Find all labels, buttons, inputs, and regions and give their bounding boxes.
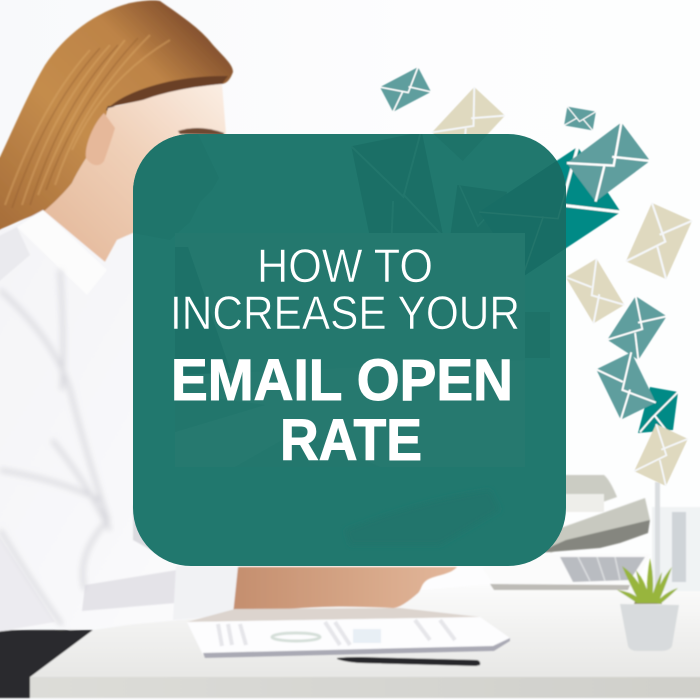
desk — [30, 585, 700, 698]
pen — [337, 657, 480, 666]
floating envelopes — [380, 67, 692, 486]
envelope: teal large — [567, 122, 650, 202]
envelope: teal lower — [596, 352, 656, 420]
white shirt — [0, 210, 240, 632]
heading: email open rate: RATE — [280, 408, 422, 473]
envelope: dark teal large — [479, 147, 621, 277]
potted plant — [617, 558, 679, 651]
envelope: beige lower — [634, 424, 688, 486]
arm and hand — [233, 567, 457, 615]
envelope: beige right — [626, 203, 692, 279]
envelope: teal tiny — [564, 107, 596, 130]
heading: email open rate — [171, 348, 513, 473]
envelope: dark teal small folds — [640, 392, 678, 432]
envelope: teal mid — [607, 296, 667, 360]
laptop screen rectangle seen through panel — [370, 233, 525, 276]
woman hair — [0, 0, 233, 232]
donut chart on paper — [272, 633, 320, 641]
papers on desk — [187, 608, 510, 658]
heading: email open rate: EMAIL OPEN — [171, 348, 513, 413]
woman face and neck — [43, 84, 226, 262]
black trousers — [0, 630, 93, 698]
ear — [86, 113, 115, 165]
heading: how to increase your — [170, 239, 520, 339]
glass — [652, 482, 700, 591]
envelope: beige mid — [566, 259, 624, 323]
eyebrow — [178, 128, 224, 135]
title panel — [133, 134, 566, 566]
telephone — [537, 475, 650, 553]
envelope: dark teal small — [638, 387, 678, 433]
envelope: teal small top — [380, 67, 431, 112]
envelope: beige top — [432, 87, 505, 161]
faint shapes showing through the panel — [133, 134, 566, 275]
laptop — [482, 554, 650, 590]
heading: how to increase your: INCREASE YOUR — [170, 286, 520, 339]
heading: how to increase your: HOW TO — [257, 239, 433, 292]
